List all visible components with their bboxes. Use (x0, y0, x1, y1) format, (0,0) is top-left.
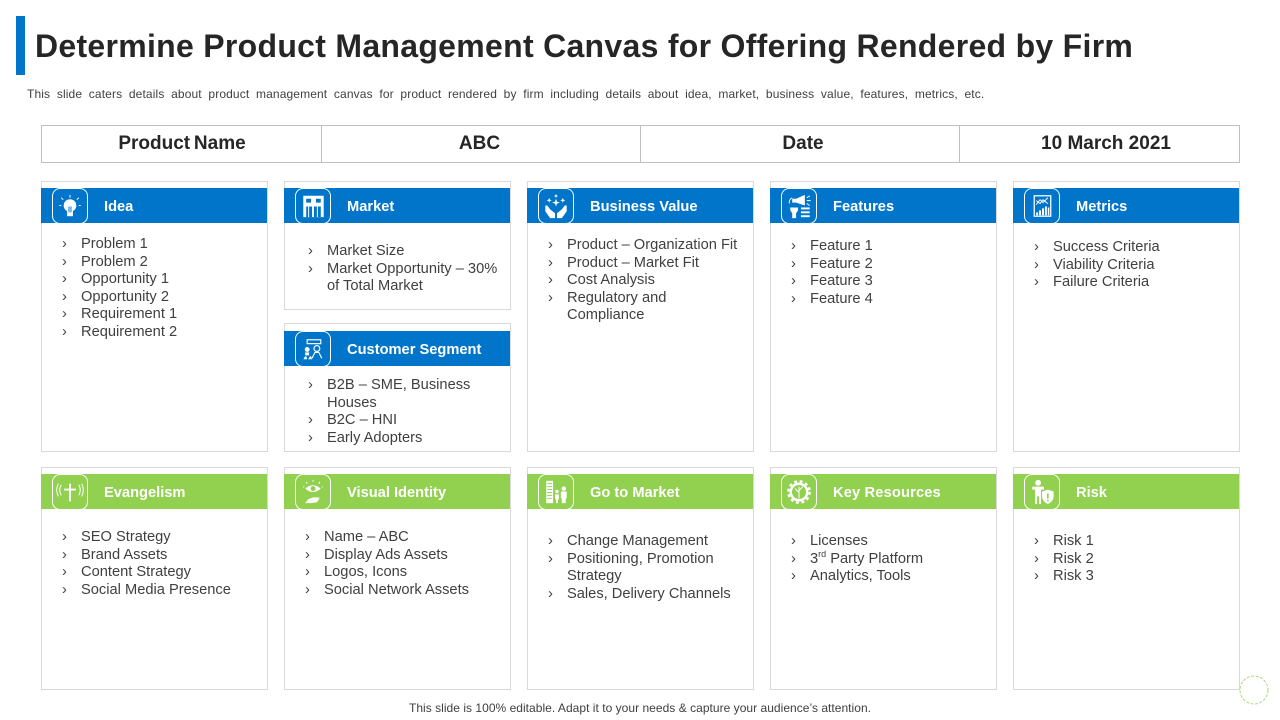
list: visual identity: Logos, Icons (324, 564, 407, 580)
header: evangelism (41, 474, 267, 509)
list: customer segment: › (308, 377, 313, 393)
header: risk (1013, 474, 1239, 509)
list: evangelism (62, 529, 231, 598)
list: risk: › (1034, 568, 1039, 584)
cell: product name value (321, 126, 640, 162)
list: features: › (791, 238, 796, 254)
list: key resources: › (791, 551, 796, 567)
header: business value (527, 188, 753, 223)
icon: customers at a board (295, 331, 331, 367)
heading: business value: Business Value (590, 199, 698, 215)
list: idea: › (62, 289, 67, 305)
list: go to market: › (548, 533, 553, 549)
list: idea: Opportunity 2 (81, 289, 169, 305)
list: business value: Compliance (567, 307, 644, 323)
heading: visual identity: Visual Identity (347, 485, 446, 501)
panel: visual identity (284, 467, 511, 690)
list: evangelism: › (62, 564, 67, 580)
list: idea: › (62, 271, 67, 287)
list: customer segment: B2C – HNI (327, 412, 397, 428)
icon: hands holding sparkles (538, 188, 574, 224)
list: visual identity: Social Network Assets (324, 582, 469, 598)
list: visual identity: › (305, 547, 310, 563)
icon: metrics report (1024, 188, 1060, 224)
list: evangelism: SEO Strategy (81, 529, 171, 545)
list: market (308, 243, 497, 294)
list: metrics: › (1034, 274, 1039, 290)
subtitle: This slide caters details about product management canvas for product rendered by firm including details about idea, market, business value, features, metrics, etc. (27, 87, 984, 101)
list: business value (548, 237, 738, 323)
icon: light bulb (52, 188, 88, 224)
list: evangelism: › (62, 547, 67, 563)
panel: features (770, 181, 997, 452)
list: metrics: › (1034, 257, 1039, 273)
list: key resources: › (791, 533, 796, 549)
cell: product name label: Product Name (118, 133, 246, 154)
cell: date label: Date (782, 133, 824, 154)
heading: idea: Idea (104, 199, 133, 215)
header: idea (41, 188, 267, 223)
list: evangelism: › (62, 582, 67, 598)
panel: key resources (770, 467, 997, 690)
list: key resources: › (791, 568, 796, 584)
list: go to market (548, 533, 731, 602)
panel: risk (1013, 467, 1240, 690)
list: features (791, 238, 873, 307)
panel: go to market (527, 467, 754, 690)
panel: market (284, 181, 511, 310)
list: features: Feature 2 (810, 256, 873, 272)
list: idea: › (62, 254, 67, 270)
header: go to market (527, 474, 753, 509)
list: features: Feature 1 (810, 238, 873, 254)
panel: customer segment (284, 323, 511, 452)
decorative dashed circle (1240, 676, 1268, 704)
list: customer segment (308, 377, 470, 446)
heading: market: Market (347, 199, 394, 215)
list: risk (1034, 533, 1094, 584)
list: customer segment: Houses (327, 395, 377, 411)
list: risk: Risk 2 (1053, 551, 1094, 567)
panel: evangelism (41, 467, 268, 690)
list: business value: Cost Analysis (567, 272, 655, 288)
list: go to market: Strategy (567, 568, 622, 584)
header: visual identity (284, 474, 510, 509)
list: visual identity (305, 529, 469, 598)
heading: metrics: Metrics (1076, 199, 1127, 215)
list: market: Market Opportunity – 30% (327, 261, 497, 277)
list: idea: › (62, 324, 67, 340)
list: features: Feature 3 (810, 273, 873, 289)
list: visual identity: › (305, 564, 310, 580)
header: key resources (770, 474, 996, 509)
list: risk: › (1034, 533, 1039, 549)
list: features: › (791, 273, 796, 289)
list: features: Feature 4 (810, 291, 873, 307)
list: go to market: Positioning, Promotion (567, 551, 714, 567)
list: evangelism: Brand Assets (81, 547, 167, 563)
list: evangelism: Social Media Presence (81, 582, 231, 598)
cell: date label (640, 126, 959, 162)
list: visual identity: Name – ABC (324, 529, 409, 545)
list: idea (62, 236, 177, 340)
list: idea: › (62, 306, 67, 322)
list: market: Market Size (327, 243, 404, 259)
list: go to market: › (548, 586, 553, 602)
list: risk: Risk 3 (1053, 568, 1094, 584)
list: risk: Risk 1 (1053, 533, 1094, 549)
cell: date value (959, 126, 1239, 162)
list: metrics: Viability Criteria (1053, 257, 1155, 273)
list: visual identity: › (305, 582, 310, 598)
list: business value: Product – Organization Fit (567, 237, 737, 253)
list: visual identity: Display Ads Assets (324, 547, 448, 563)
header: metrics (1013, 188, 1239, 223)
list: customer segment: › (308, 430, 313, 446)
list: go to market: Sales, Delivery Channels (567, 586, 731, 602)
list: go to market: › (548, 551, 553, 567)
icon: megaphone with checklist (781, 188, 817, 224)
list: evangelism: › (62, 529, 67, 545)
list: idea: Problem 2 (81, 254, 148, 270)
list: evangelism: Content Strategy (81, 564, 191, 580)
panel: idea (41, 181, 268, 452)
list: market: › (308, 243, 313, 259)
title accent bar (16, 16, 25, 75)
list: risk: › (1034, 551, 1039, 567)
list: business value: › (548, 255, 553, 271)
list: features: › (791, 291, 796, 307)
list: business value: Regulatory and (567, 290, 666, 306)
header: features (770, 188, 996, 223)
icon: person with shield (1024, 474, 1060, 510)
icon: storefront (295, 188, 331, 224)
list: key resources: Analytics, Tools (810, 568, 911, 584)
list: features: › (791, 256, 796, 272)
heading: evangelism: Evangelism (104, 485, 185, 501)
heading: features: Features (833, 199, 894, 215)
list: idea: Opportunity 1 (81, 271, 169, 287)
list: business value: › (548, 272, 553, 288)
panel: business value (527, 181, 754, 452)
product info table (41, 125, 1240, 163)
list: go to market: Change Management (567, 533, 708, 549)
icon: eye over hand (295, 474, 331, 510)
panel: metrics (1013, 181, 1240, 452)
list: idea: › (62, 236, 67, 252)
heading: go to market: Go to Market (590, 485, 680, 501)
list: idea: Requirement 1 (81, 306, 177, 322)
heading: key resources: Key Resources (833, 485, 941, 501)
list: metrics: › (1034, 239, 1039, 255)
list: customer segment: › (308, 412, 313, 428)
list: key resources: 3rd Party Platform (810, 549, 923, 567)
list: business value: › (548, 237, 553, 253)
list: business value: Product – Market Fit (567, 255, 699, 271)
list: customer segment: B2B – SME, Business (327, 377, 470, 393)
title: Determine Product Management Canvas for Offering Rendered by Firm (35, 28, 1133, 64)
list: customer segment: Early Adopters (327, 430, 422, 446)
footer note: This slide is 100% editable. Adapt it to your needs & capture your audience’s attention. (409, 701, 871, 715)
header: customer segment (284, 331, 510, 366)
list: metrics: Success Criteria (1053, 239, 1160, 255)
list: idea: Requirement 2 (81, 324, 177, 340)
heading: customer segment: Customer Segment (347, 342, 481, 358)
heading: risk: Risk (1076, 485, 1107, 501)
list: metrics (1034, 239, 1160, 290)
list: metrics: Failure Criteria (1053, 274, 1149, 290)
list: business value: › (548, 290, 553, 306)
icon: building and people (538, 474, 574, 510)
list: key resources (791, 533, 923, 584)
icon: gear with tree (781, 474, 817, 510)
cell: date value: 10 March 2021 (1041, 133, 1171, 154)
list: key resources: Licenses (810, 533, 868, 549)
list: market: › (308, 261, 313, 277)
icon: broadcasting cross (52, 474, 88, 510)
list: visual identity: › (305, 529, 310, 545)
list: idea: Problem 1 (81, 236, 148, 252)
header: market (284, 188, 510, 223)
cell: product name value: ABC (459, 133, 500, 154)
list: market: of Total Market (327, 278, 423, 294)
